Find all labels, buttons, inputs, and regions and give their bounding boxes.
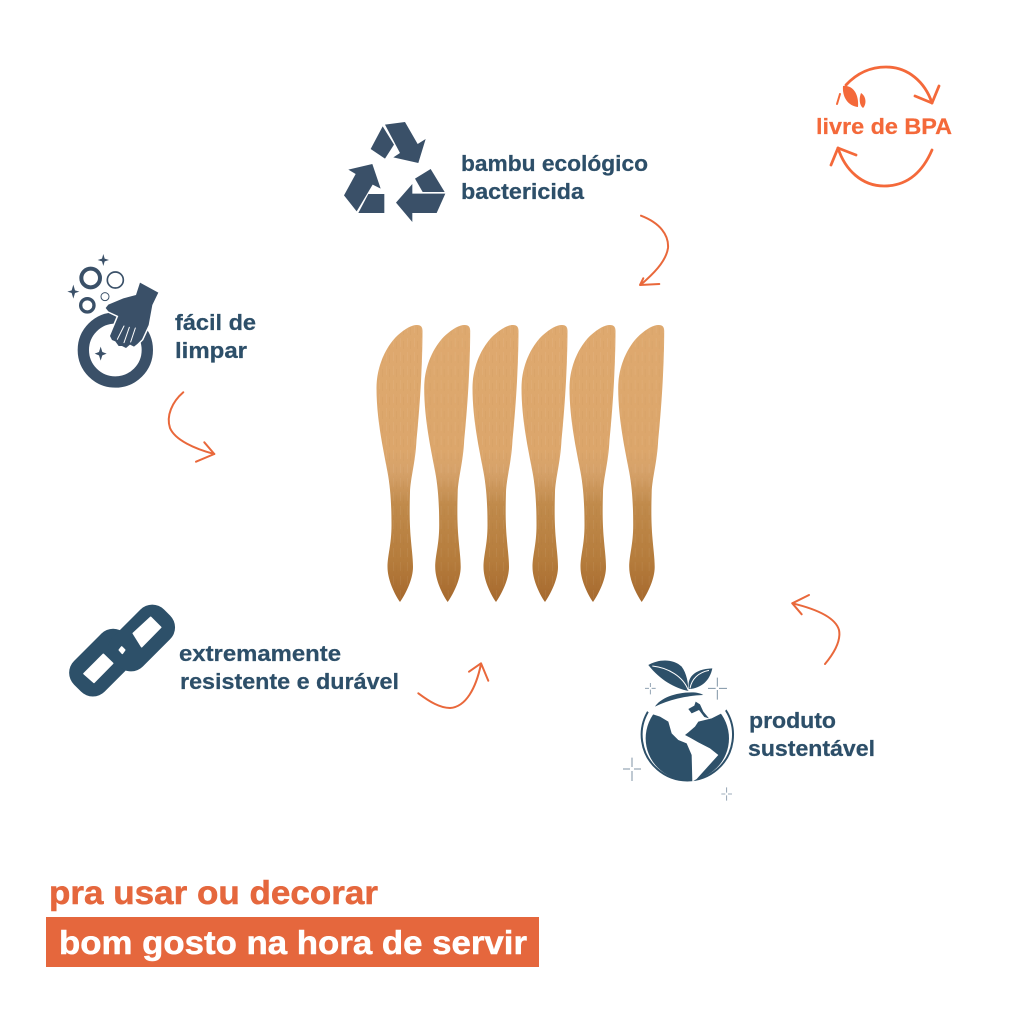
- icon: chain link: [62, 598, 182, 703]
- sparkles: [67, 254, 109, 361]
- arrow: from durability to knives: [418, 663, 488, 708]
- plate ring: [83, 318, 147, 382]
- knife 6: [618, 325, 664, 602]
- circular arrows: [831, 67, 939, 186]
- panel: bamboo knives photo: [376, 325, 664, 602]
- text: bambu ecológico bactericida: [461, 151, 648, 204]
- text: bambu ecológico bactericida: bambu ecológico: [461, 151, 648, 176]
- hand: [106, 283, 158, 348]
- text: fácil de limpar: limpar: [175, 338, 247, 363]
- finger lines: [117, 326, 135, 343]
- knife 1: [376, 325, 422, 602]
- knife 5: [570, 325, 616, 602]
- leaves: [648, 660, 712, 691]
- land mass: [645, 697, 732, 782]
- link holes: [84, 617, 161, 682]
- label: livre de BPA: livre de BPA: [816, 114, 952, 139]
- knife 4: [522, 325, 568, 602]
- text: produto sustentável: sustentável: [748, 736, 875, 761]
- text: produto sustentável: [748, 708, 875, 761]
- arrow: from sustainability to knives: [792, 595, 839, 664]
- icon: recycle symbol: [344, 122, 445, 222]
- thin outer ring: [642, 710, 733, 780]
- banner: bom gosto na hora de servir: [46, 917, 539, 967]
- sparkles: [623, 678, 732, 801]
- icon: hand cleaning a plate: [67, 254, 158, 382]
- arrow: from bamboo to knives: [640, 216, 668, 285]
- heading: pra usar ou decorar: pra usar ou decorar: [49, 874, 378, 911]
- text: fácil de limpar: fácil de: [175, 310, 256, 335]
- text: produto sustentável: produto: [749, 708, 836, 733]
- icon: free of BPA badge: [816, 67, 952, 186]
- text: bambu ecológico bactericida: bactericida: [461, 179, 585, 204]
- text: extremamente resistente e durável: [179, 641, 399, 694]
- links: [62, 598, 182, 703]
- leaves: [843, 86, 865, 108]
- knife 3: [472, 325, 518, 602]
- icon: globe with leaves: [623, 660, 733, 801]
- knife 2: [424, 325, 470, 602]
- text: fácil de limpar: [175, 310, 256, 363]
- greenland: [688, 702, 709, 718]
- leaf veins: [652, 666, 709, 690]
- banner: bom gosto na hora de servir: bom gosto na hora de servir: [59, 924, 527, 961]
- north polar cap: [655, 692, 703, 707]
- arrow: from cleaning to knives: [169, 392, 214, 462]
- text: extremamente resistente e durável: extremamente: [179, 641, 341, 666]
- text: extremamente resistente e durável: resistente e durável: [180, 669, 399, 694]
- globe disc: [646, 697, 729, 780]
- bubbles: [81, 269, 123, 312]
